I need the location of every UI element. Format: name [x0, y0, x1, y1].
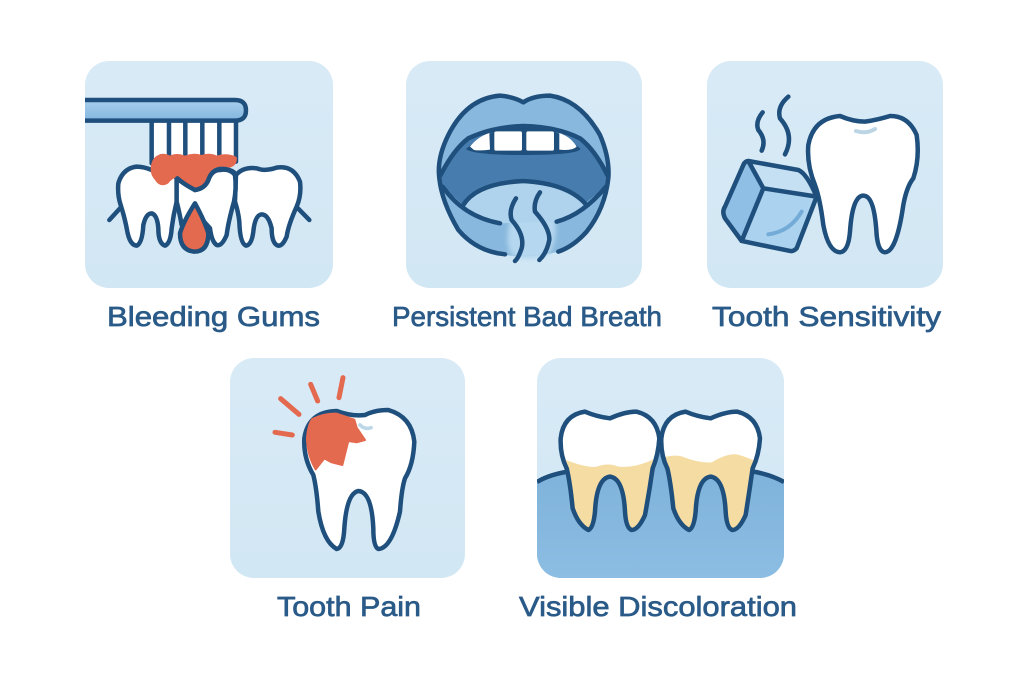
label: Visible Discoloration: Visible Discoloration [519, 591, 797, 622]
label: Bleeding Gums: Bleeding Gums [107, 301, 320, 332]
panel: persistent bad breath [406, 61, 642, 288]
tongue lower glow [507, 215, 556, 259]
pain area [307, 414, 365, 469]
icon: aching tooth [275, 378, 414, 549]
tooth highlight [856, 129, 875, 132]
tooth [808, 116, 918, 252]
infographic canvas [85, 61, 943, 617]
label: Tooth Sensitivity: Tooth Sensitivity [712, 301, 941, 332]
icon: tooth with ice cube [723, 97, 918, 252]
label: Persistent Bad Breath: Persistent Bad Breath [392, 301, 662, 332]
gum inflammation [151, 154, 237, 189]
gums [537, 450, 784, 578]
icon: open mouth [439, 96, 609, 261]
panel: bleeding gums [85, 61, 333, 288]
gum line strokes [177, 169, 234, 190]
tooth [304, 410, 414, 549]
lips [439, 96, 609, 256]
bristles [152, 122, 236, 163]
icon: discolored teeth [561, 412, 760, 535]
label: Tooth Pain: Tooth Pain [277, 591, 421, 622]
tooth: right [235, 167, 300, 246]
panel: tooth pain [230, 358, 465, 578]
left tooth [561, 412, 659, 535]
blood drop [180, 203, 208, 252]
mouth interior [441, 126, 607, 205]
gum side lines [109, 208, 309, 220]
ice cube [723, 161, 817, 251]
tongue [463, 181, 585, 223]
tooth highlight [360, 425, 371, 428]
panel: visible discoloration [537, 358, 784, 578]
right tooth [661, 412, 760, 535]
tooth: left [118, 167, 177, 246]
tooth: middle [177, 170, 236, 245]
pain rays [275, 378, 343, 435]
toothbrush head [85, 100, 246, 121]
mouth outlines [439, 96, 609, 254]
breath waves [511, 192, 549, 261]
teeth [466, 126, 581, 155]
steam lines [757, 97, 789, 154]
panel: tooth sensitivity [707, 61, 943, 288]
icon: toothbrush and bleeding gums [85, 100, 309, 252]
